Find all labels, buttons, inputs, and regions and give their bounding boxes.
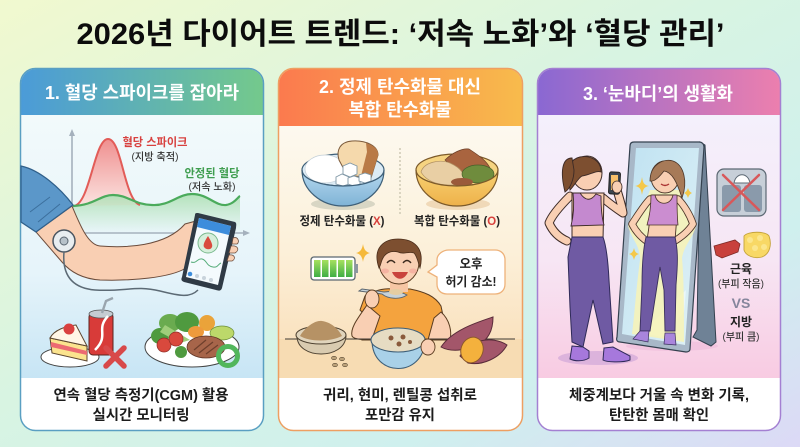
panel 2 heading: 복합 탄수화물 (348, 100, 452, 120)
panel 1 heading: 1. 혈당 스파이크를 잡아라 (45, 83, 239, 103)
callout: 오후 허기 감소: 허기 감소! (446, 274, 496, 289)
muscle vs fat comparison text: (부피 작음) (718, 278, 764, 290)
mirror reflection (632, 160, 693, 345)
glucose chart (69, 129, 250, 236)
icon: arm with CGM sensor (21, 166, 208, 295)
icon: grain bowl (296, 321, 348, 367)
icon: battery (311, 257, 358, 280)
panel 3 heading: 3. ‘눈바디’의 생활화 (583, 84, 733, 104)
panel: 눈바디 (538, 68, 780, 430)
icon: oatmeal bowl (371, 328, 435, 368)
panel 1 footer text: 실시간 모니터링 (92, 407, 190, 424)
icon: healthy plate with green O (145, 312, 239, 367)
panel 2 footer text: 귀리, 현미, 렌틸콩 섭취로 (323, 387, 477, 404)
muscle vs fat comparison text: 근육 (730, 262, 752, 276)
table line (285, 338, 515, 340)
glucose chart: (지방 축적) (132, 150, 178, 163)
label: refined carbs: 정제 탄수화물 (X) (300, 213, 384, 228)
panel 1 header band (21, 69, 263, 115)
muscle vs fat comparison text: 지방 (730, 315, 752, 329)
icon: complex carbs bowl (416, 149, 498, 210)
glucose chart: (저속 노화) (188, 181, 236, 193)
icon: refined carbs bowl (302, 141, 384, 210)
muscle vs fat comparison text (718, 262, 764, 343)
callout: 오후 허기 감소 (428, 250, 505, 294)
title: 2026년 다이어트 트렌드: ‘저속 노화’와 ‘혈당 관리’ (76, 18, 725, 51)
muscle vs fat comparison text: (부피 큼) (722, 331, 760, 343)
illustration: boy eating (352, 239, 451, 340)
icon: muscle and fat (714, 232, 770, 258)
callout: 오후 허기 감소: 오후 (459, 256, 483, 271)
stable label: 안정된 혈당 (184, 166, 240, 180)
panel: 복합 탄수화물 (278, 68, 522, 430)
icon: crossed out scale (717, 169, 766, 216)
muscle vs fat comparison text: VS (732, 295, 750, 311)
label: complex carbs: 복합 탄수화물 (O) (414, 213, 500, 228)
panel: 혈당 스파이크 (20, 68, 264, 430)
panel 1 footer text: 연속 혈당 측정기(CGM) 활용 (54, 387, 228, 404)
divider (399, 148, 401, 214)
spike label: 혈당 스파이크 (122, 135, 188, 149)
panel 1 footer text (54, 387, 228, 424)
panel 3 header band (538, 69, 780, 115)
green O (218, 346, 238, 366)
icon: phone with glucose app (181, 213, 238, 291)
icon: sweet potatoes (441, 317, 507, 366)
panel 3 footer text: 탄탄한 몸매 확인 (609, 407, 709, 424)
panel 2 heading: 2. 정제 탄수화물 대신 (319, 77, 481, 97)
panel 3 footer text (569, 387, 749, 424)
panel 3 footer text: 체중계보다 거울 속 변화 기록, (569, 387, 749, 404)
icon: cake and soda with red X (41, 298, 124, 367)
red X (106, 348, 124, 366)
icon: sparkle (356, 244, 370, 262)
panel 2 heading (319, 77, 481, 120)
illustration: woman taking photo (549, 156, 638, 365)
panel 2 footer text (323, 387, 477, 424)
illustration: mirror (617, 142, 718, 352)
panel 2 header band (279, 69, 522, 126)
panel 2 footer text: 포만감 유지 (365, 407, 435, 424)
